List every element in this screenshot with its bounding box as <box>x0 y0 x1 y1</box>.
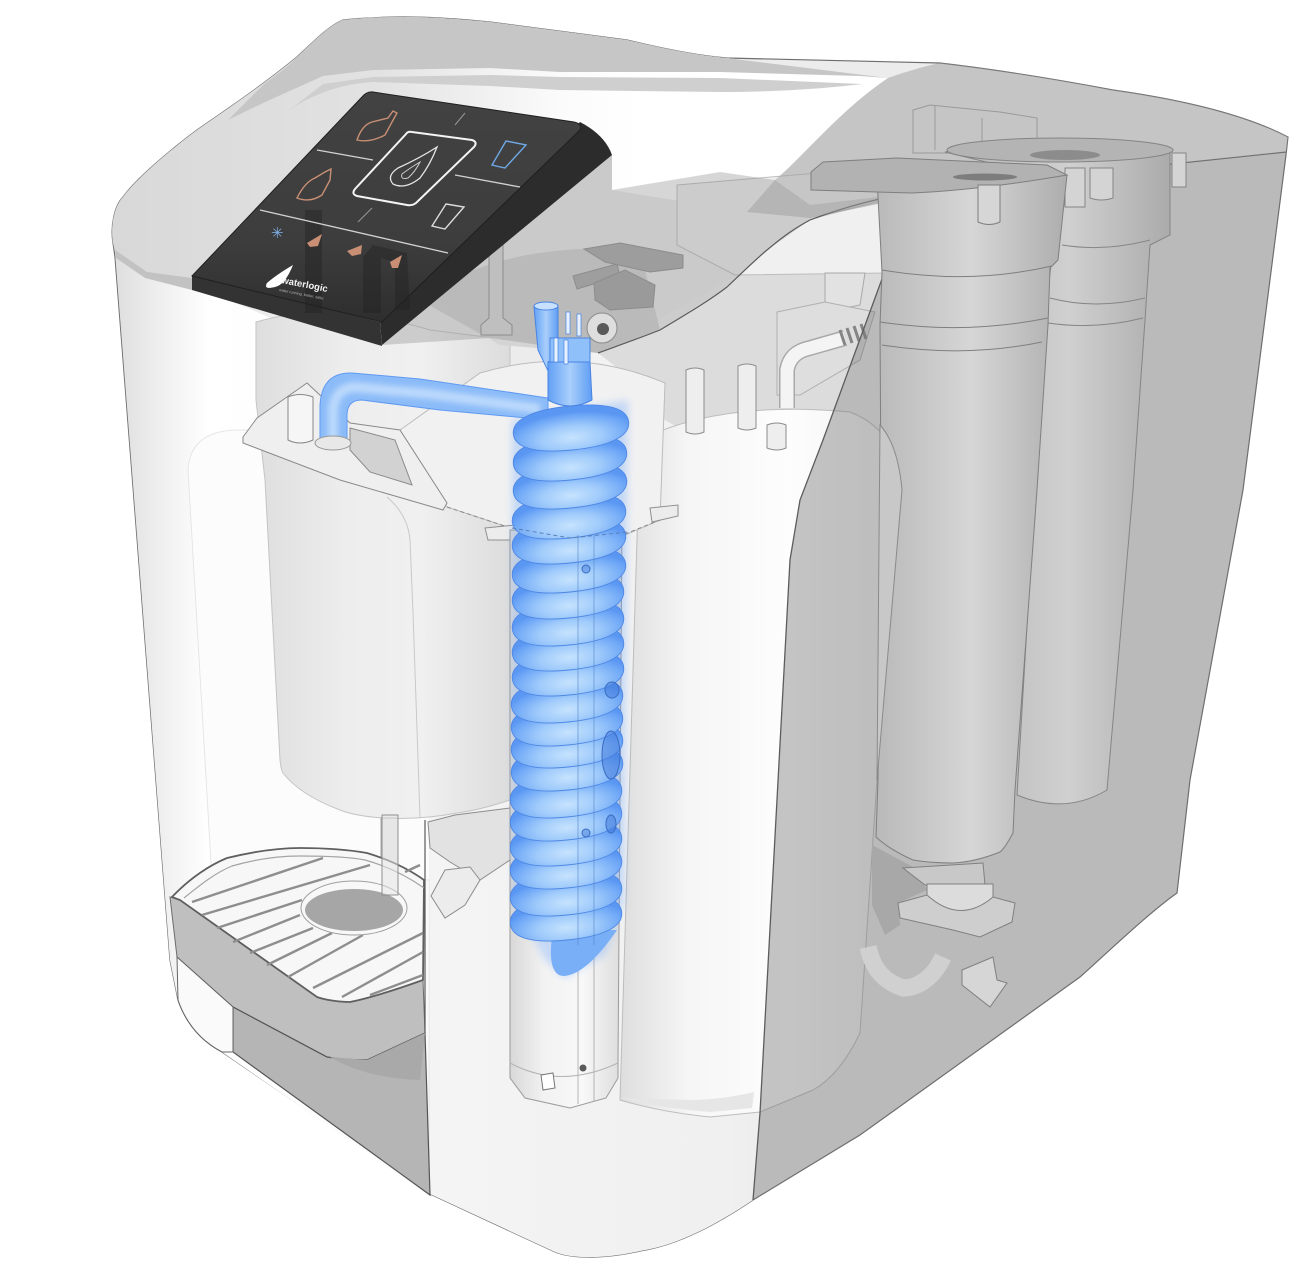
pillar two <box>738 364 756 430</box>
internal pillars and valves <box>420 222 866 918</box>
shell upper lighter zone <box>747 63 1288 218</box>
lid rim strip <box>115 250 192 290</box>
column lines over coil <box>578 535 594 945</box>
rear bracket outlines <box>913 105 1037 153</box>
filter cartridge front <box>811 158 1067 863</box>
logo <box>266 265 329 301</box>
bracket fitting cylinder <box>288 394 313 443</box>
shell left edge line <box>753 197 912 1200</box>
rear filter plate <box>947 138 1173 162</box>
housing seam over coil <box>512 528 628 538</box>
tube opening <box>534 302 558 310</box>
latch <box>541 1073 555 1090</box>
valve body <box>594 270 655 310</box>
tank bracket <box>243 383 447 510</box>
cold tank housing <box>400 361 678 540</box>
blue sensor head <box>548 312 592 406</box>
top left bottle icon <box>357 111 397 141</box>
flange tab right <box>650 505 678 522</box>
front filter peg <box>978 185 1000 224</box>
base under tray <box>233 1007 430 1195</box>
central front panel <box>430 190 915 1257</box>
panel side edge <box>380 122 612 345</box>
front filter hole <box>953 174 1017 180</box>
panel divider lines <box>260 150 520 253</box>
left bottle icon <box>297 169 331 200</box>
white glass icon <box>432 204 464 229</box>
valve handle <box>573 264 620 289</box>
rear tank bottom shade <box>620 1092 754 1112</box>
lid front edge line <box>598 152 1286 353</box>
spring <box>840 324 866 345</box>
lower valve clip <box>431 867 480 918</box>
coil holes <box>582 565 620 837</box>
rear filter hole <box>1030 150 1100 160</box>
outlet spout <box>381 818 398 890</box>
flange tab left <box>485 525 517 540</box>
logo wordmark: waterlogic <box>279 275 329 295</box>
filter cartridge rear <box>945 138 1186 804</box>
elbow pipe <box>787 338 845 408</box>
tube shadow arch <box>363 245 410 313</box>
disc top of tank <box>420 249 660 353</box>
cooling coil glow <box>512 400 628 978</box>
panel short dashes <box>358 113 465 222</box>
panel face <box>192 92 581 322</box>
sensor pins <box>554 312 581 364</box>
blue glass icon <box>492 141 526 168</box>
short pillar <box>767 423 786 450</box>
compression fitting <box>587 313 617 343</box>
box lower block <box>825 273 865 312</box>
white equipment box under lid <box>677 170 912 395</box>
rear white glow behind left tank <box>188 430 430 880</box>
tray inner rim <box>184 856 424 898</box>
screw hole <box>580 1064 586 1072</box>
blue coil turns <box>508 400 631 976</box>
valve cross <box>584 243 683 272</box>
mechanism backdrop <box>598 193 912 500</box>
drop icon <box>390 147 437 186</box>
pipe highlight <box>333 387 540 440</box>
tube shadow one <box>305 210 322 313</box>
lid upper surface <box>112 17 888 345</box>
lid second grey band <box>287 75 862 112</box>
left water tank <box>256 313 510 890</box>
dispense tube <box>382 815 398 895</box>
drain opening <box>301 881 407 935</box>
bracket inner parts <box>350 428 412 485</box>
rear relay block <box>777 302 875 395</box>
base left white strip <box>177 957 233 1052</box>
central button <box>353 132 476 205</box>
smoked translucent lid section <box>382 155 912 353</box>
right side translucent shell <box>747 63 1288 1200</box>
left front panel <box>115 252 430 1195</box>
rod with nut <box>481 222 512 335</box>
tray top grid <box>172 848 424 1002</box>
sensor rear block <box>550 338 590 362</box>
blue inlet tube <box>534 302 558 375</box>
tray ribs <box>192 858 423 997</box>
tank dome in front of filter <box>877 425 902 780</box>
pillar one <box>686 368 704 434</box>
drop inner <box>402 162 420 178</box>
pipe base ring <box>315 436 351 450</box>
drip tray <box>170 815 425 1060</box>
tray front band <box>170 897 425 1060</box>
lid top grey band <box>228 17 888 120</box>
front filter top plate <box>811 158 1067 193</box>
panel divider <box>424 820 426 1033</box>
horizontal blue pipe <box>315 373 548 450</box>
support column <box>510 530 622 1108</box>
tank inner curve <box>387 497 420 817</box>
logo tagline: water running. better. safer. <box>279 288 325 301</box>
lower valve body <box>428 808 510 880</box>
snow icon: ✳ <box>271 225 284 242</box>
small tap icons <box>307 234 402 268</box>
rear filter pegs <box>1065 153 1186 207</box>
housing dashed seam <box>447 507 660 538</box>
dark recess behind front filter valve <box>872 845 927 935</box>
control panel <box>192 92 612 346</box>
big rear tank <box>620 409 902 1117</box>
base inner shadow <box>330 1033 425 1080</box>
filter bottom valve <box>868 863 1015 1007</box>
